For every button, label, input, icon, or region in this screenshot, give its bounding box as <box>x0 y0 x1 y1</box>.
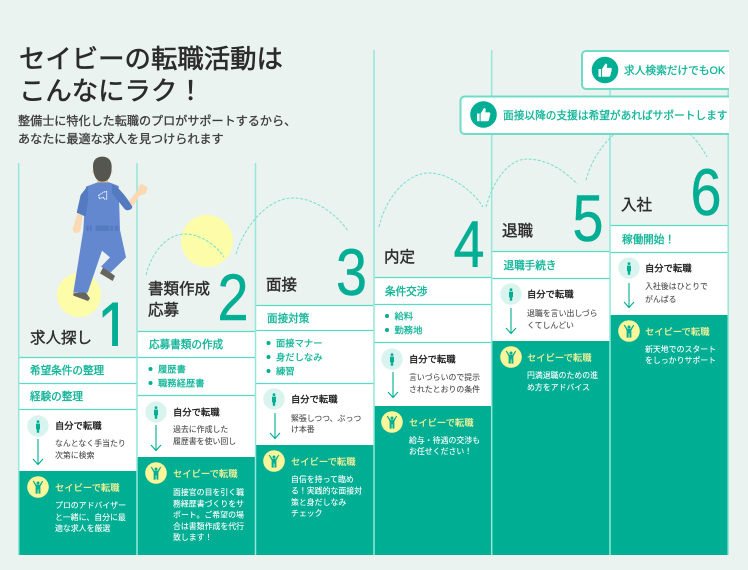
step 2 body <box>137 331 256 457</box>
icon: thumbs up <box>470 101 497 128</box>
seibii support: 面接官の目を引く職 <box>173 487 244 497</box>
panel: step 5 <box>492 181 610 555</box>
title <box>19 44 283 106</box>
decorative yellow circle, step 1 <box>57 273 101 317</box>
seibii support: 策と身だしなみ <box>291 497 346 507</box>
step 6 body <box>610 225 728 315</box>
step 2 number: 2 <box>218 260 248 334</box>
step 4 task: 条件交渉 <box>385 285 428 298</box>
step 1 number: 1 <box>97 287 131 370</box>
step 4 body <box>374 277 492 406</box>
step 3 number: 3 <box>336 235 367 309</box>
step 1 tasks <box>30 364 105 403</box>
callout: job search only <box>582 51 742 89</box>
seibii support <box>256 445 374 555</box>
step 5 task: 退職手続き <box>504 259 556 272</box>
self job change <box>618 257 708 308</box>
step 5 number: 5 <box>572 181 604 255</box>
step 6 number: 6 <box>690 155 722 229</box>
step 2 heading: 書類作成 <box>148 280 210 298</box>
subtitle: 整備士に特化した転職のプロがサポートするから、 <box>18 113 296 128</box>
self job change: くてしんどい <box>527 321 574 330</box>
step 2 task: 応募書類の作成 <box>149 338 224 351</box>
callout: support after interview <box>460 96 748 134</box>
shoe back <box>100 267 115 281</box>
sleeve left <box>77 186 88 217</box>
self job change <box>500 283 598 334</box>
step 5 body <box>492 251 610 341</box>
seibii support: 務経歴書づくりをサ <box>173 498 244 508</box>
seibii support <box>19 471 137 555</box>
self job change <box>381 348 480 398</box>
belt <box>87 226 118 231</box>
self job change: 自分で転職 <box>527 288 574 300</box>
panel: step 2 <box>137 260 256 555</box>
step 4 list: 勤務地 <box>394 324 422 336</box>
step 4 heading: 内定 <box>384 248 415 266</box>
seibii support: セイビーで転職 <box>527 352 592 363</box>
seibii support: と一緒に、自分に最 <box>55 512 126 522</box>
panel: step 3 <box>256 235 374 555</box>
seibii support: セイビーで転職 <box>645 326 710 337</box>
self job change <box>27 415 126 464</box>
coverall <box>73 182 126 293</box>
dashed jump arcs <box>146 118 707 275</box>
self job change: 自分で転職 <box>55 420 102 431</box>
panel: step 4 <box>374 207 492 555</box>
step 4 list <box>385 310 422 336</box>
seibii support: 合は書類作成を代行 <box>173 521 244 531</box>
seibii support <box>610 315 728 555</box>
seibii support: 自信を持って臨め <box>291 474 354 484</box>
self job change: 次第に検索 <box>55 450 95 460</box>
seibii support: チェック <box>291 509 323 518</box>
self job change: 履歴書を使い回し <box>173 436 236 446</box>
decorative yellow circle, step 2 <box>181 215 233 267</box>
callout: support after interview: 面接以降の支援は希望があればサポートします <box>503 109 727 122</box>
seibii support: お任せください！ <box>409 446 472 456</box>
seibii support: る！実践的な面接対 <box>291 486 362 496</box>
hand and forearm right <box>128 183 148 206</box>
self job change: 自分で転職 <box>291 394 338 404</box>
self job change: 退職を言い出しづら <box>527 308 598 318</box>
callout: job search only: 求人検索だけでもOK <box>624 64 726 77</box>
step 2 heading <box>148 280 210 319</box>
step 3 list <box>266 338 322 376</box>
seibii support: セイビーで転職 <box>55 482 120 493</box>
step 3 list: 練習 <box>276 366 295 376</box>
sleeve right <box>112 185 132 210</box>
step 5 heading: 退職 <box>502 222 534 240</box>
self job change <box>263 388 361 438</box>
seibii support: 適な求人を厳選 <box>55 523 110 533</box>
self job change: 自分で転職 <box>409 354 456 364</box>
step 3 body <box>256 305 374 445</box>
seibii support <box>137 457 256 555</box>
title: セイビーの転職活動は <box>19 44 283 74</box>
self job change: なんとなく手当たり <box>55 438 126 448</box>
icon: thumbs up <box>592 57 618 83</box>
neck <box>97 178 108 184</box>
seibii support: ポート。ご希望の場 <box>173 510 244 520</box>
subtitle <box>18 113 296 146</box>
subtitle: あなたに最適な求人を見つけられます <box>18 132 224 146</box>
self job change <box>145 401 236 450</box>
seibii support <box>492 341 610 555</box>
seibii support: セイビーで転職 <box>173 468 238 479</box>
step 2 heading: 応募 <box>148 301 180 319</box>
panel: step 1 <box>19 287 137 555</box>
step 6 heading: 入社 <box>621 196 653 214</box>
shoe front <box>73 292 90 301</box>
back logo <box>99 191 107 199</box>
seibii support: 給与・待遇の交渉も <box>409 435 480 445</box>
self job change: 過去に作成した <box>173 424 228 434</box>
forearm left <box>73 213 83 233</box>
step 3 list: 面接マナー <box>276 338 322 348</box>
self job change: 言いづらいので提示 <box>409 372 480 382</box>
panel: step 6 <box>610 155 728 555</box>
self job change: 自分で転職 <box>173 406 220 418</box>
step 3 heading: 面接 <box>266 276 297 294</box>
ears <box>92 168 113 176</box>
self job change: がんばる <box>645 294 677 304</box>
seibii support: 致します！ <box>173 532 212 542</box>
step 4 list: 給料 <box>394 310 413 322</box>
title: こんなにラク！ <box>19 76 204 106</box>
seibii support: め方をアドバイス <box>527 382 590 392</box>
self job change: 入社後はひとりで <box>645 281 708 291</box>
step 2 list <box>148 364 204 388</box>
step 4 number: 4 <box>454 207 484 281</box>
step 1 heading: 求人探し <box>30 329 92 347</box>
step 1 tasks: 経験の整理 <box>30 390 83 403</box>
seibii support: セイビーで転職 <box>409 417 474 428</box>
seibii support: 新天地でのスタート <box>645 344 716 354</box>
step 2 list: 履歴書 <box>158 364 186 374</box>
self job change: け本番 <box>291 424 315 434</box>
seibii support <box>374 406 492 555</box>
illustration: mechanic jumping <box>73 157 148 301</box>
head <box>93 157 112 182</box>
seibii support: をしっかりサポート <box>645 356 716 365</box>
self job change: 緊張しつつ、ぶっつ <box>291 414 361 423</box>
step 3 list: 身だしなみ <box>276 352 322 362</box>
self job change: されたとおりの条件 <box>409 384 480 394</box>
seibii support: セイビーで転職 <box>291 456 356 467</box>
step 1 body <box>19 357 137 471</box>
step 2 list: 職務経歴書 <box>158 378 204 388</box>
step 1 tasks: 希望条件の整理 <box>30 364 105 377</box>
step 3 task: 面接対策 <box>267 312 310 325</box>
seibii support: 円満退職のための進 <box>527 370 598 380</box>
self job change: 自分で転職 <box>645 262 692 274</box>
step 6 task: 稼働開始！ <box>622 233 675 246</box>
seibii support: プロのアドバイザー <box>55 501 126 510</box>
